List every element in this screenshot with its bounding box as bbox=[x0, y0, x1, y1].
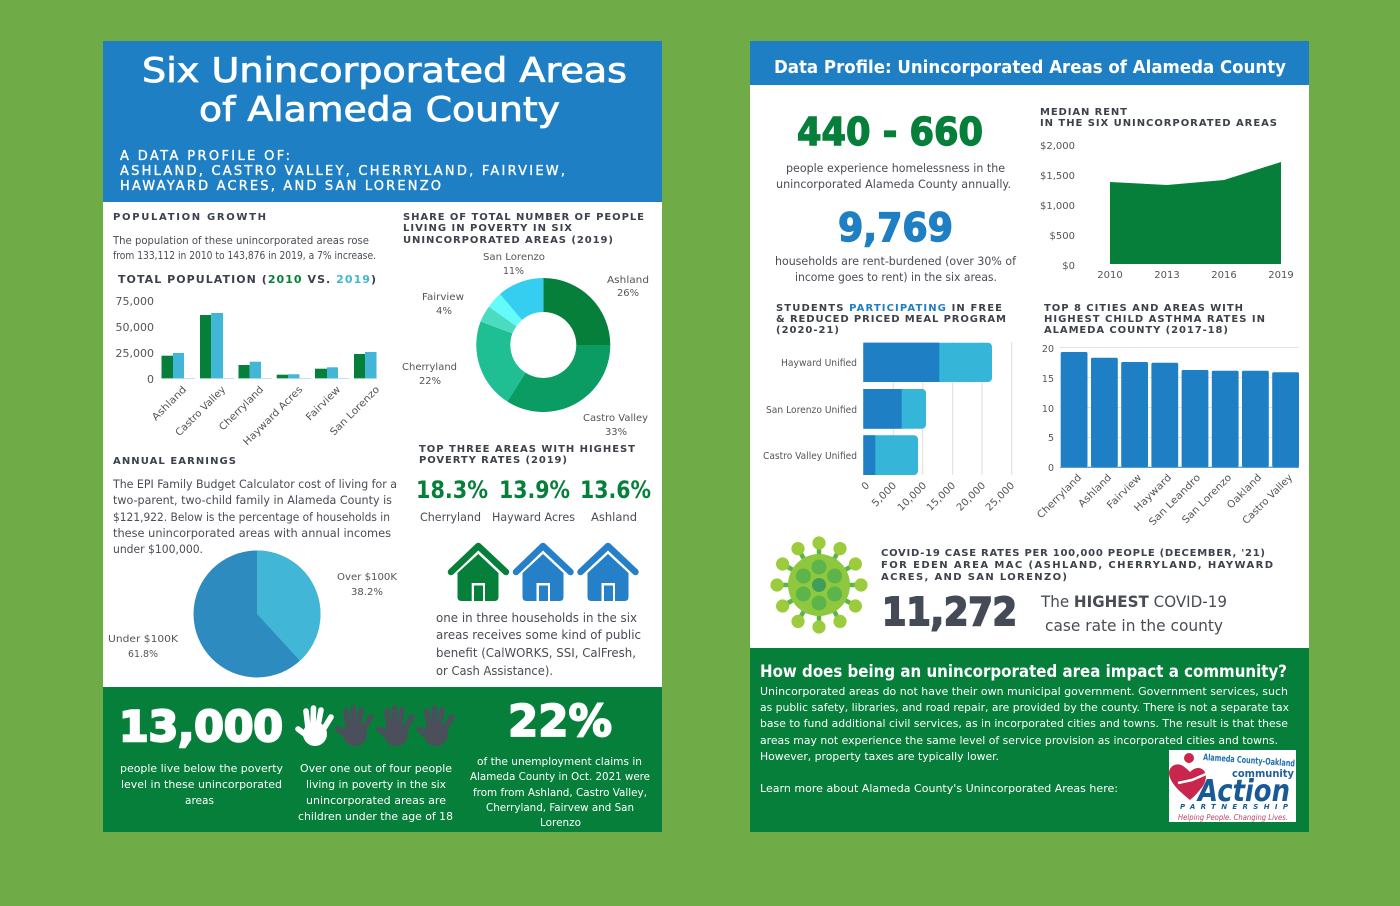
public benefit text: or Cash Assistance). bbox=[436, 663, 553, 678]
public benefit text: areas receives some kind of public bbox=[436, 627, 641, 642]
area chart: median rent: $0 bbox=[1062, 261, 1075, 272]
bar chart: asthma rates: 15 bbox=[1042, 374, 1054, 385]
pie chart: annual incomes bbox=[108, 550, 397, 678]
annual earnings text: two-parent, two-child family in Alameda County is bbox=[113, 493, 392, 507]
bar chart: asthma rates: Fairview bbox=[1105, 472, 1144, 511]
area chart: median rent: 2019 bbox=[1268, 270, 1294, 281]
median rent heading: IN THE SIX UNINCORPORATED AREAS bbox=[1040, 118, 1277, 129]
stacked bar chart: meal program: Castro Valley Unified bbox=[763, 451, 857, 462]
covid heading bbox=[881, 548, 1273, 583]
public benefit text: one in three households in the six bbox=[436, 610, 637, 625]
stacked bar chart: meal program: San Lorenzo Unified bbox=[766, 405, 857, 416]
donut chart: poverty share: 26% bbox=[617, 288, 639, 299]
bar chart: asthma rates: San Lorenzo bbox=[1180, 472, 1234, 526]
donut chart: poverty share: Cherryland bbox=[402, 362, 457, 373]
stat: 22%: Cherryland, Fairvew and San bbox=[486, 801, 634, 814]
median rent heading bbox=[1040, 107, 1277, 129]
subtitle bbox=[120, 149, 565, 194]
bar chart: total population bbox=[116, 295, 382, 448]
meal program heading bbox=[776, 303, 1006, 336]
stat: rent burdened bbox=[775, 206, 1017, 284]
asthma heading: ALAMEDA COUNTY (2017-18) bbox=[1044, 325, 1228, 336]
stat: homelessness: unincorporated Alameda County annually. bbox=[776, 177, 1011, 191]
poverty share heading: UNINCORPORATED AREAS (2019) bbox=[403, 235, 613, 246]
population growth text: from 133,112 in 2010 to 143,876 in 2019, a 7% increase. bbox=[113, 249, 376, 262]
impact text: base to fund additional civil services, as in incorporated cities and towns. The result is that these bbox=[760, 717, 1288, 730]
icon: three houses bbox=[451, 546, 636, 601]
annual earnings heading: ANNUAL EARNINGS bbox=[113, 456, 236, 467]
impact text: Learn more about Alameda County's Unincorporated Areas here: bbox=[760, 782, 1118, 795]
stacked bar chart: meal program: 25,000 bbox=[984, 480, 1017, 514]
poverty rate: Hayward Acres: 13.9% bbox=[499, 476, 570, 504]
highest poverty rates heading bbox=[419, 444, 635, 466]
stacked bar chart: meal program bbox=[763, 342, 1017, 514]
stat: children in poverty: living in poverty in the six bbox=[306, 778, 446, 791]
logo: community action partnership: Action bbox=[1196, 774, 1290, 809]
bar chart: total population: 0 bbox=[147, 373, 154, 386]
stat: 22%: Alameda County in Oct. 2021 were bbox=[470, 770, 650, 783]
stacked bar chart: meal program: 0 bbox=[860, 480, 872, 493]
area chart: median rent: 2016 bbox=[1211, 270, 1237, 281]
donut chart: poverty share: Ashland bbox=[607, 275, 649, 286]
meal program heading: & REDUCED PRICED MEAL PROGRAM bbox=[776, 314, 1006, 325]
bar chart: asthma rates: Cherryland bbox=[1035, 472, 1084, 521]
impact text: Unincorporated areas do not have their own municipal government. Government services, such bbox=[760, 685, 1288, 698]
donut chart: poverty share: 11% bbox=[503, 266, 524, 277]
area chart: median rent: $1,000 bbox=[1040, 201, 1075, 212]
bar chart: asthma rates: 10 bbox=[1042, 404, 1054, 415]
annual earnings text: these unincorporated areas with annual incomes bbox=[113, 526, 391, 540]
stat: children in poverty: unincorporated areas are bbox=[306, 794, 446, 807]
bar chart: total population: 50,000 bbox=[116, 321, 154, 334]
panel: impact explanation bbox=[750, 648, 1309, 832]
bar chart: asthma rates: Hayward bbox=[1132, 472, 1174, 514]
public benefit text: benefit (CalWORKS, SSI, CalFresh, bbox=[436, 645, 636, 660]
poverty rate: Ashland: Ashland bbox=[591, 510, 637, 524]
area chart: median rent: $500 bbox=[1050, 231, 1075, 242]
impact heading: How does being an unincorporated area impact a community? bbox=[760, 662, 1287, 682]
impact text: areas may not experience the same level of service provision as incorporated cities and towns. bbox=[760, 734, 1278, 747]
logo: community action partnership bbox=[1169, 750, 1296, 822]
population growth text bbox=[112, 234, 376, 262]
stat: 11,272: 11,272 bbox=[882, 590, 1017, 634]
stat: rent burdened: income goes to rent) in the six areas. bbox=[795, 270, 997, 284]
covid heading: FOR EDEN AREA MAC (ASHLAND, CHERRYLAND, HAYWARD bbox=[881, 560, 1273, 571]
meal program heading: STUDENTS PARTICIPATING IN FREE bbox=[776, 303, 1002, 314]
covid note: case rate in the county bbox=[1045, 616, 1223, 635]
poverty share heading bbox=[403, 212, 644, 246]
header banner bbox=[750, 41, 1309, 85]
poverty rate: Hayward Acres: Hayward Acres bbox=[492, 510, 575, 524]
area chart: median rent: $1,500 bbox=[1040, 171, 1075, 182]
median rent heading: MEDIAN RENT bbox=[1040, 107, 1127, 118]
impact text: as public safety, libraries, and road repair, are provided by the county. There is not a separate tax bbox=[760, 701, 1289, 714]
impact text: However, property taxes are typically lower. bbox=[760, 750, 999, 763]
bar chart: asthma rates: San Leandro bbox=[1147, 472, 1203, 528]
covid note bbox=[1040, 592, 1227, 635]
title bbox=[142, 51, 627, 130]
pie chart: annual incomes: 38.2% bbox=[351, 587, 383, 598]
poverty rate: Ashland bbox=[580, 476, 651, 524]
stat: 22%: of the unemployment claims in bbox=[477, 755, 642, 768]
logo: community action partnership: Helping People. Changing Lives. bbox=[1178, 813, 1288, 822]
bar chart: asthma rates: Castro Valley bbox=[1241, 472, 1295, 527]
asthma heading: TOP 8 CITIES AND AREAS WITH bbox=[1044, 303, 1243, 314]
poverty rate: Ashland: 13.6% bbox=[580, 476, 651, 504]
annual earnings text bbox=[112, 477, 397, 556]
annual earnings text: $121,922. Below is the percentage of households in bbox=[113, 510, 390, 524]
pie chart: annual incomes: Under $100K bbox=[108, 634, 178, 645]
logo: community action partnership: PARTNERSHIP bbox=[1180, 803, 1289, 811]
panel: left poster bbox=[103, 41, 662, 832]
bar chart: total population: 75,000 bbox=[116, 295, 154, 308]
stat: 22%: Lorenzo bbox=[540, 816, 581, 829]
stat: homelessness bbox=[776, 110, 1011, 191]
bar chart: asthma rates: Oakland bbox=[1225, 472, 1264, 511]
donut chart: poverty share: Castro Valley bbox=[583, 413, 648, 424]
panel: bottom statistics band bbox=[103, 687, 662, 832]
stacked bar chart: meal program: 5,000 bbox=[870, 480, 899, 509]
poverty rate: Cherryland: 18.3% bbox=[416, 476, 488, 504]
stat: children in poverty: Over one out of four people bbox=[300, 762, 452, 775]
area chart: median rent bbox=[1040, 141, 1294, 281]
public benefit text bbox=[436, 610, 641, 678]
bar chart: asthma rates: 20 bbox=[1042, 344, 1054, 355]
stat: children in poverty: children under the age of 18 bbox=[298, 810, 453, 823]
donut chart: poverty share: 22% bbox=[419, 376, 441, 387]
bar chart: asthma rates: 5 bbox=[1048, 433, 1054, 444]
stacked bar chart: meal program: 20,000 bbox=[955, 480, 988, 514]
subtitle: HAWAYARD ACRES, AND SAN LORENZO bbox=[120, 179, 441, 194]
poverty share heading: SHARE OF TOTAL NUMBER OF PEOPLE bbox=[403, 212, 644, 223]
asthma heading bbox=[1044, 303, 1265, 336]
stat: homelessness: people experience homelessness in the bbox=[786, 161, 1005, 175]
pie chart: annual incomes: 61.8% bbox=[128, 649, 158, 660]
bar chart: total population: San Lorenzo bbox=[328, 384, 382, 438]
poverty rate: Cherryland: Cherryland bbox=[420, 510, 481, 524]
donut chart: poverty share: Fairview bbox=[422, 292, 464, 303]
highest poverty rates heading: POVERTY RATES (2019) bbox=[419, 455, 567, 466]
poverty share heading: LIVING IN POVERTY IN SIX bbox=[403, 223, 572, 234]
icon: coronavirus bbox=[770, 536, 868, 634]
area chart: median rent: 2010 bbox=[1097, 270, 1123, 281]
bar chart: total population: Ashland bbox=[150, 384, 189, 423]
icon: four hands bbox=[298, 708, 452, 746]
stat: 22%: from from Ashland, Castro Valley, bbox=[473, 786, 647, 799]
donut chart: poverty share bbox=[402, 252, 649, 438]
stat: 13,000 bbox=[119, 702, 283, 807]
donut chart: poverty share: San Lorenzo bbox=[483, 252, 545, 263]
header banner: Data Profile: Unincorporated Areas of Alameda County bbox=[774, 57, 1286, 78]
stacked bar chart: meal program: 10,000 bbox=[896, 480, 929, 514]
stacked bar chart: meal program: 15,000 bbox=[925, 480, 958, 514]
bar chart: total population: 25,000 bbox=[116, 347, 154, 360]
stat: rent burdened: households are rent-burdened (over 30% of bbox=[775, 254, 1017, 268]
poverty rate: Hayward Acres bbox=[492, 476, 575, 524]
stat: homelessness: 440 - 660 bbox=[797, 110, 983, 154]
stat: children in poverty bbox=[298, 762, 453, 823]
bar chart: total population: Hayward Acres bbox=[241, 384, 305, 448]
subtitle: A DATA PROFILE OF: bbox=[120, 149, 290, 164]
panel: right poster bbox=[750, 41, 1309, 832]
bar chart: asthma rates bbox=[1035, 344, 1299, 528]
bar chart: total population: Castro Valley bbox=[174, 384, 228, 439]
covid note: The HIGHEST COVID-19 bbox=[1040, 592, 1227, 611]
highest poverty rates heading: TOP THREE AREAS WITH HIGHEST bbox=[419, 444, 635, 455]
stat: 13,000: people live below the poverty bbox=[120, 762, 283, 775]
bar chart: total population: Cherryland bbox=[217, 384, 266, 433]
impact text bbox=[760, 685, 1289, 795]
subtitle: ASHLAND, CASTRO VALLEY, CHERRYLAND, FAIRVIEW, bbox=[120, 164, 565, 179]
meal program heading: (2020-21) bbox=[776, 325, 839, 336]
area chart: median rent: 2013 bbox=[1154, 270, 1180, 281]
annual earnings text: The EPI Family Budget Calculator cost of living for a bbox=[112, 477, 397, 491]
bar chart: asthma rates: Ashland bbox=[1077, 472, 1114, 510]
donut chart: poverty share: 33% bbox=[605, 427, 627, 438]
stacked bar chart: meal program: Hayward Unified bbox=[781, 358, 857, 369]
bar chart: total population: Fairview bbox=[304, 384, 343, 423]
total population heading: TOTAL POPULATION (2010 VS. 2019) bbox=[118, 273, 376, 286]
asthma heading: HIGHEST CHILD ASTHMA RATES IN bbox=[1044, 314, 1265, 325]
stat: 22%: 22% bbox=[508, 696, 612, 747]
covid heading: COVID-19 CASE RATES PER 100,000 PEOPLE (DECEMBER, '21) bbox=[881, 548, 1265, 559]
poverty rate: Cherryland bbox=[416, 476, 488, 524]
covid heading: ACRES, AND SAN LORENZO) bbox=[881, 572, 1067, 583]
donut chart: poverty share: 4% bbox=[436, 306, 452, 317]
header banner bbox=[103, 41, 662, 202]
logo: community action partnership: Alameda County-Oakland bbox=[1203, 753, 1295, 769]
stat: rent burdened: 9,769 bbox=[838, 206, 953, 251]
title: of Alameda County bbox=[199, 90, 560, 130]
pie chart: annual incomes: Over $100K bbox=[337, 572, 397, 583]
logo: community action partnership: community bbox=[1232, 767, 1294, 780]
stat: 13,000: 13,000 bbox=[119, 702, 283, 751]
stat: 13,000: areas bbox=[185, 794, 214, 807]
bar chart: asthma rates: 0 bbox=[1048, 463, 1054, 474]
area chart: median rent: $2,000 bbox=[1040, 141, 1075, 152]
title: Six Unincorporated Areas bbox=[142, 51, 627, 91]
stat: 22% bbox=[470, 696, 650, 829]
annual earnings text: under $100,000. bbox=[113, 542, 203, 556]
stat: 13,000: level in these unincorporated bbox=[121, 778, 282, 791]
population growth heading: POPULATION GROWTH bbox=[113, 212, 266, 223]
population growth text: The population of these unincorporated areas rose bbox=[112, 234, 369, 247]
